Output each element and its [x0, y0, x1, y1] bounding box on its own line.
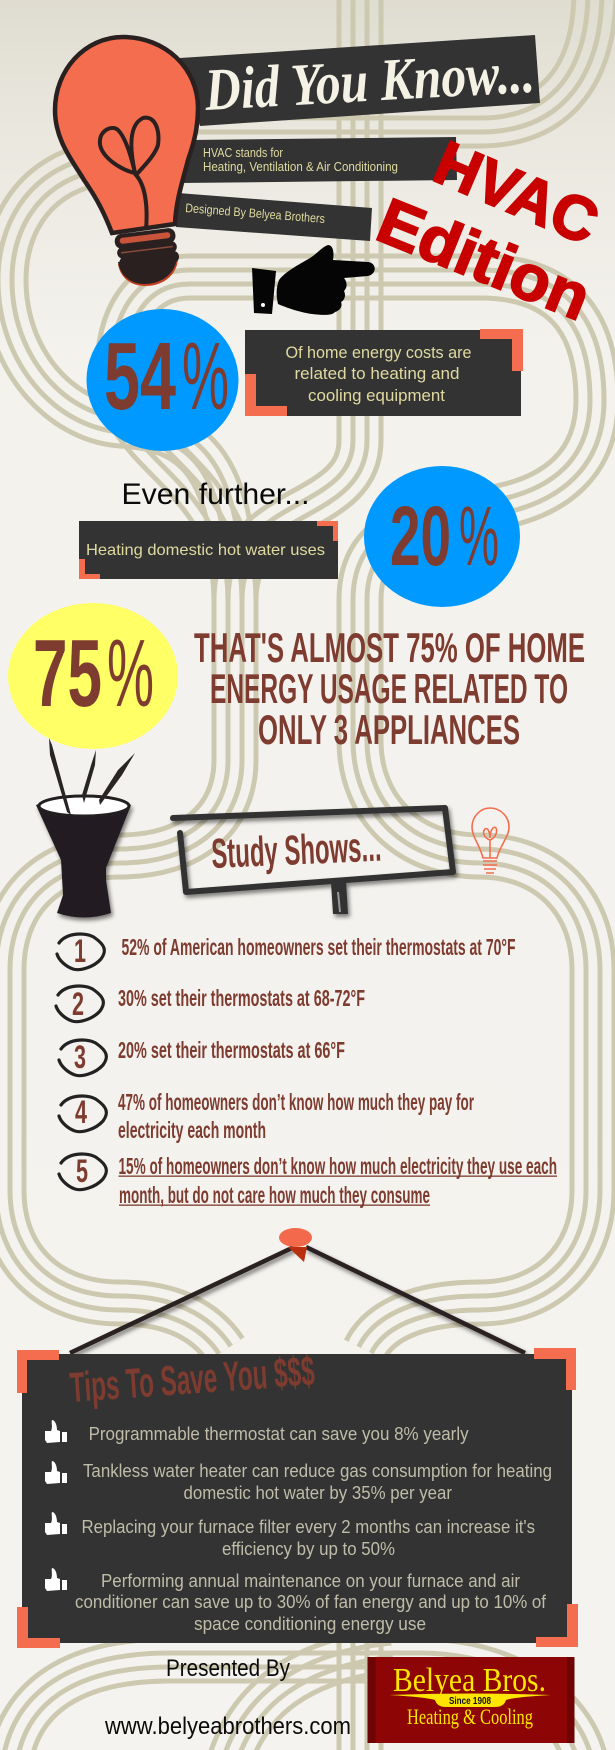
panel: home energy costs	[245, 329, 523, 416]
stat circle: 75%: 75	[33, 620, 102, 727]
list item 3	[59, 1037, 345, 1076]
stat circle: 54%: 54	[104, 323, 176, 430]
tip 2: domestic hot water by 35% per year	[184, 1483, 452, 1503]
banner: designer credit	[176, 193, 372, 241]
list item 2: 2	[72, 986, 84, 1022]
stat circle: 20%: 20	[390, 489, 451, 583]
list item 4: 4	[75, 1094, 87, 1130]
panel: home energy costs: related to heating and	[294, 365, 460, 383]
list item 4: electricity each month	[118, 1117, 266, 1143]
text: website: www.belyeabrothers.com	[104, 1713, 351, 1740]
list item 2: 30% set their thermostats at 68-72°F	[118, 985, 365, 1011]
stat circle: 75%	[8, 603, 178, 749]
icon: pointing hand	[252, 245, 375, 315]
tip 4: conditioner can save up to 30% of fan energy and up to 10% of	[75, 1592, 547, 1612]
heading sign: Study Shows: Study Shows...	[210, 823, 382, 877]
stat circle: 75%: %	[107, 620, 154, 727]
tip 3: efficiency by up to 50%	[222, 1539, 395, 1559]
banner: HVAC definition: Heating, Ventilation & Air Conditioning	[203, 160, 398, 174]
hanging wires and pin	[70, 1228, 525, 1353]
list item 5: 5	[76, 1153, 88, 1189]
stat circle: 20%	[364, 466, 520, 607]
icon: small bulb	[472, 808, 509, 873]
panel: home energy costs: Of home energy costs are	[286, 344, 472, 362]
heading: HVAC Edition: HVAC	[425, 128, 608, 258]
logo: Belyea Bros: Heating & Cooling	[407, 1704, 533, 1729]
text: Presented By: Presented By	[166, 1655, 290, 1682]
list item 3: 3	[74, 1039, 86, 1075]
list item 2	[56, 985, 365, 1022]
title banner: Did You Know	[180, 35, 540, 126]
list item 1: 1	[74, 933, 86, 969]
list item 1	[57, 933, 516, 970]
tip 3: Replacing your furnace filter every 2 months can increase it's	[82, 1517, 535, 1537]
icon: light bulb	[55, 37, 198, 286]
banner: HVAC definition	[180, 137, 457, 183]
panel: domestic hot water: Heating domestic hot water uses	[86, 542, 325, 559]
tip 2	[45, 1461, 552, 1503]
heading: HVAC Edition: Edition	[368, 184, 601, 334]
heading: Even further: Even further...	[122, 478, 310, 511]
icon: vase with sticks	[36, 738, 135, 918]
banner: designer credit: Designed By Belyea Brothers	[185, 201, 325, 226]
stat circle: 20%: %	[459, 489, 499, 583]
title text: Did You Know...	[202, 39, 536, 123]
heading: HVAC Edition	[368, 128, 608, 334]
headline: 75 percent of usage	[194, 624, 585, 753]
panel: home energy costs: cooling equipment	[308, 387, 445, 405]
panel: domestic hot water	[79, 521, 338, 579]
logo: Belyea Bros: Since 1908	[449, 1695, 491, 1707]
logo: Belyea Bros: Belyea Bros.	[393, 1662, 546, 1699]
list item 5	[59, 1153, 557, 1208]
tip 4: Performing annual maintenance on your furnace and air	[101, 1571, 520, 1591]
numbered list: study results	[56, 933, 557, 1208]
heading sign: Study Shows	[173, 808, 453, 914]
tip 1: Programmable thermostat can save you 8% yearly	[89, 1424, 469, 1444]
tip 4	[45, 1568, 547, 1634]
panel: tips	[17, 1347, 578, 1648]
banner: HVAC definition: HVAC stands for	[203, 146, 283, 160]
list item 3: 20% set their thermostats at 66°F	[118, 1037, 345, 1063]
tips heading: Tips To Save You $$$	[68, 1347, 316, 1411]
logo: Belyea Bros	[368, 1657, 574, 1743]
stat circle: 54%	[86, 309, 238, 451]
tip 3	[45, 1512, 535, 1559]
tip 2: Tankless water heater can reduce gas consumption for heating	[83, 1461, 552, 1481]
list item 4	[59, 1089, 474, 1143]
stat circle: 54%: %	[182, 323, 229, 430]
tip 4: space conditioning energy use	[194, 1614, 426, 1634]
